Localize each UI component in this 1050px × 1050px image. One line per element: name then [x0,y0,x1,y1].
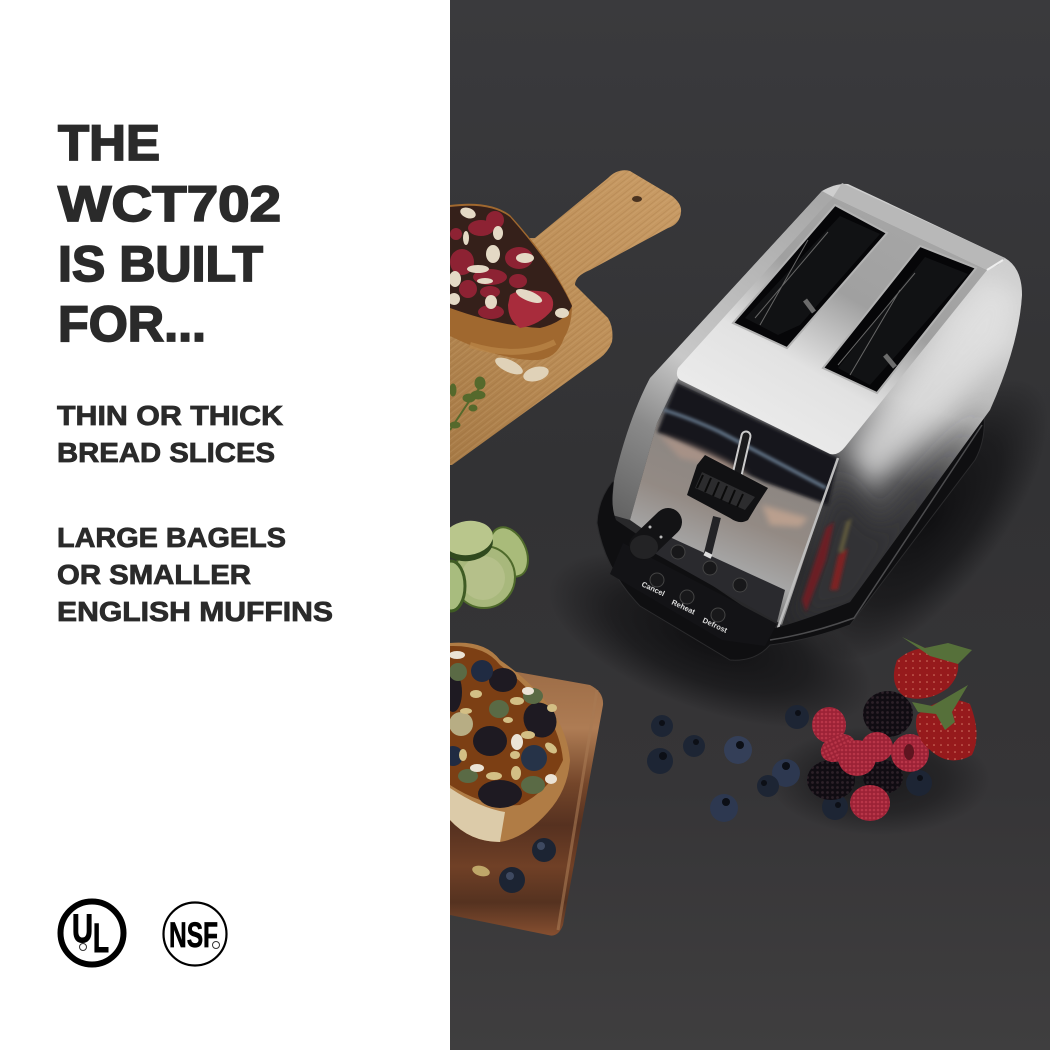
icon: UL certification mark: L [93,915,109,961]
blueberries [647,705,932,822]
text block: bread slices: THIN OR THICK [57,400,283,431]
heading: THE [58,115,160,171]
button labels: Reheat [670,598,697,617]
left toaster slot [733,205,887,348]
control panel [610,538,785,633]
heading: FOR... [58,296,206,352]
text block: bread slices [57,400,283,468]
icon: NSF certification mark: NSF [169,916,218,955]
toaster base [597,415,984,660]
button labels [642,582,728,633]
cucumber slices [450,520,529,612]
acacia cutting board [450,660,603,936]
board blueberries and seed [471,838,556,893]
left rim [612,191,833,520]
text block: bread slices: BREAD SLICES [57,437,275,468]
front edge highlight [778,458,838,628]
almond slivers [495,358,549,382]
lever [687,436,768,557]
text block: bagels and muffins: OR SMALLER [57,559,251,590]
toaster [597,170,1030,660]
side reflection of berries [802,518,852,612]
right toaster slot [823,246,976,393]
browning dial [630,522,668,559]
front face [630,383,838,625]
toaster top plate [677,197,987,454]
text block: bagels and muffins: ENGLISH MUFFINS [57,596,333,627]
toast with berries and seeds [443,643,570,842]
heading: IS BUILT [58,236,263,292]
blackberries [807,691,913,800]
toast with chocolate and strawberries [448,204,572,360]
panel: product photo [437,0,1050,1050]
panel: white text column [0,0,450,1050]
button labels: Cancel [640,580,666,598]
front dark reflection band [657,383,838,505]
strawberries [894,648,958,699]
strawberry leaves [902,637,972,730]
side lower dark [810,412,984,616]
text block: bagels and muffins [57,522,333,627]
thyme sprig [450,377,485,430]
heading [58,115,281,352]
icon: NSF certification mark [164,902,226,966]
text block: bagels and muffins: LARGE BAGELS [57,522,286,553]
side highlight [850,275,1022,490]
berries [647,637,990,835]
button labels: Defrost [701,616,729,635]
berry shadows [793,737,968,824]
icon: UL certification mark: U [72,907,93,951]
icon: UL certification mark [60,902,124,964]
toaster chrome body [600,170,1030,640]
raspberries [812,707,929,821]
bamboo cutting board [450,170,681,465]
heading: WCT702 [58,176,281,232]
